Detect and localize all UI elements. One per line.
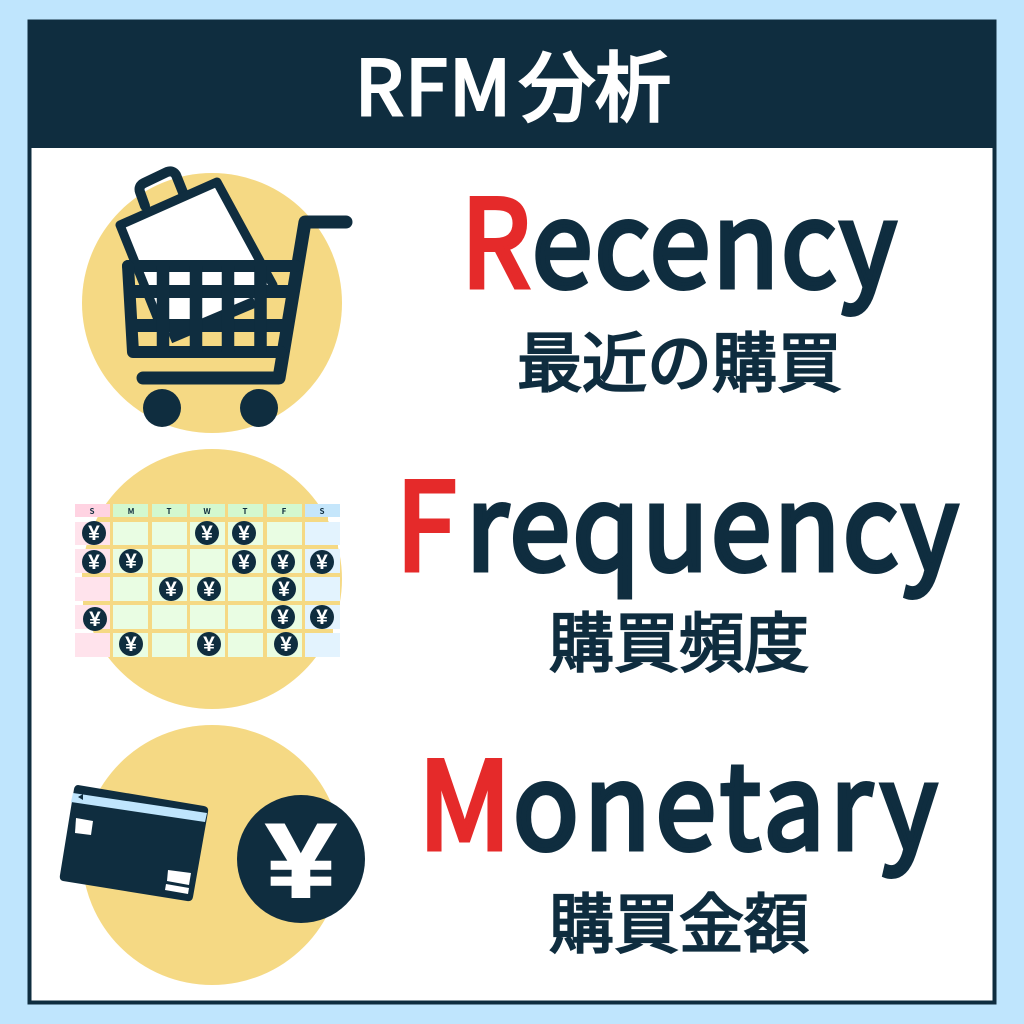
- icon: calendar with yen coins: ¥: [165, 578, 177, 601]
- icon: calendar with yen coins: ¥: [203, 578, 215, 601]
- icon: calendar with yen coins: ¥: [277, 551, 289, 574]
- icon: calendar with yen coins: W: [203, 506, 211, 517]
- icon: calendar with yen coins: ¥: [277, 606, 289, 629]
- icon: calendar with yen coins: [75, 449, 342, 709]
- icon: calendar with yen coins: ¥: [203, 633, 215, 656]
- icon: calendar with yen coins: ¥: [238, 551, 250, 574]
- heading: Recency: R: [461, 147, 530, 323]
- icon: calendar with yen coins: S: [90, 506, 94, 517]
- icon: credit card and yen coin: [60, 725, 365, 985]
- icon: calendar with yen coins: ¥: [88, 551, 100, 574]
- label: recent purchase: 最近の購買: [517, 311, 842, 405]
- heading: Monetary: onetary: [513, 712, 937, 883]
- heading: Monetary: M: [418, 709, 511, 884]
- icon: calendar with yen coins: ¥: [125, 633, 137, 656]
- title: RFM: [355, 27, 513, 137]
- label: purchase frequency: 購買頻度: [549, 591, 809, 685]
- icon: calendar with yen coins: S: [320, 506, 324, 517]
- heading: Frequency: F: [396, 430, 456, 606]
- icon: calendar with yen coins: ¥: [125, 550, 137, 573]
- label: purchase amount: 購買金額: [549, 872, 809, 966]
- heading: Frequency: requency: [466, 433, 958, 604]
- icon: calendar with yen coins: ¥: [278, 578, 290, 601]
- title banner: [28, 20, 996, 148]
- icon: calendar with yen coins: ¥: [316, 551, 328, 574]
- icon: calendar with yen coins: ¥: [238, 522, 250, 545]
- icon: calendar with yen coins: T: [166, 506, 172, 517]
- icon: calendar with yen coins: F: [282, 506, 287, 517]
- icon: calendar with yen coins: ¥: [316, 606, 328, 629]
- icon: calendar with yen coins: M: [128, 506, 135, 517]
- icon: calendar with yen coins: ¥: [201, 522, 213, 545]
- icon: credit card and yen coin: ¥: [266, 801, 336, 920]
- icon: calendar with yen coins: ¥: [89, 608, 101, 631]
- icon: calendar with yen coins: ¥: [88, 522, 100, 545]
- icon: calendar with yen coins: T: [242, 506, 248, 517]
- heading: Recency: ecency: [532, 150, 896, 321]
- title: 分析: [519, 27, 671, 137]
- icon: calendar with yen coins: ¥: [280, 633, 292, 656]
- icon: shopping cart: [82, 171, 346, 433]
